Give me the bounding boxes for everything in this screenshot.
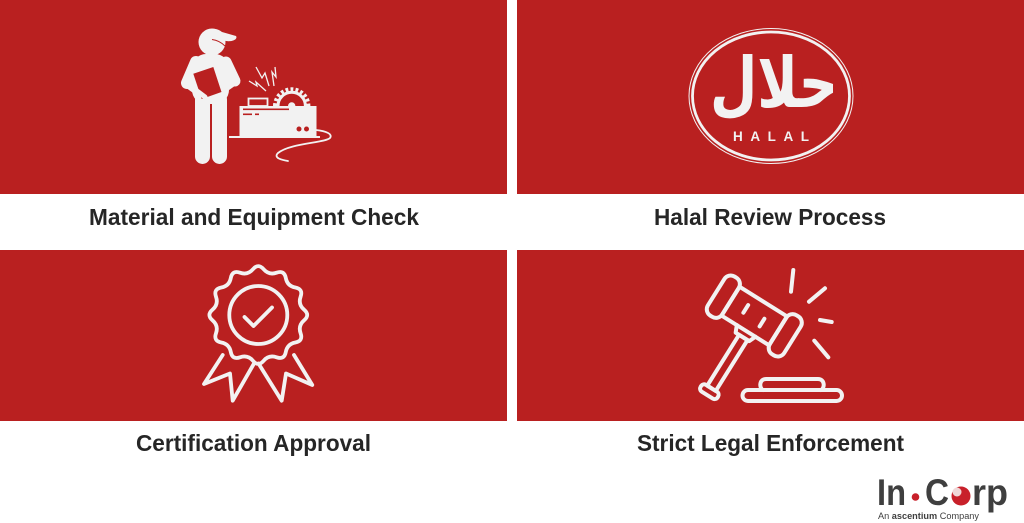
panel: strict legal enforcement — [517, 250, 1024, 421]
logo: InCorp: In — [877, 472, 906, 513]
icon: worker checking machine — [187, 28, 331, 164]
logo: InCorp: rp — [972, 472, 1008, 513]
arabic wordmark: حلال — [710, 42, 838, 124]
heading: material and equipment check: Material and Equipment Check — [89, 204, 419, 230]
panel: material and equipment check — [0, 0, 507, 194]
halal wordmark: HALAL — [733, 129, 809, 144]
icon: certification rosette — [204, 266, 312, 401]
logo: InCorp — [877, 472, 1008, 521]
heading: certification approval: Certification Approval — [136, 430, 371, 456]
panel: halal review process — [517, 0, 1024, 194]
logo: InCorp: C — [925, 472, 949, 513]
logo: InCorp: An ascentium Company — [878, 511, 979, 521]
icon: gavel — [667, 270, 842, 418]
icon: halal logo — [689, 28, 853, 164]
heading: halal review process: Halal Review Process — [654, 204, 886, 230]
panel: certification approval — [0, 250, 507, 421]
heading: strict legal enforcement: Strict Legal Enforcement — [637, 430, 904, 456]
